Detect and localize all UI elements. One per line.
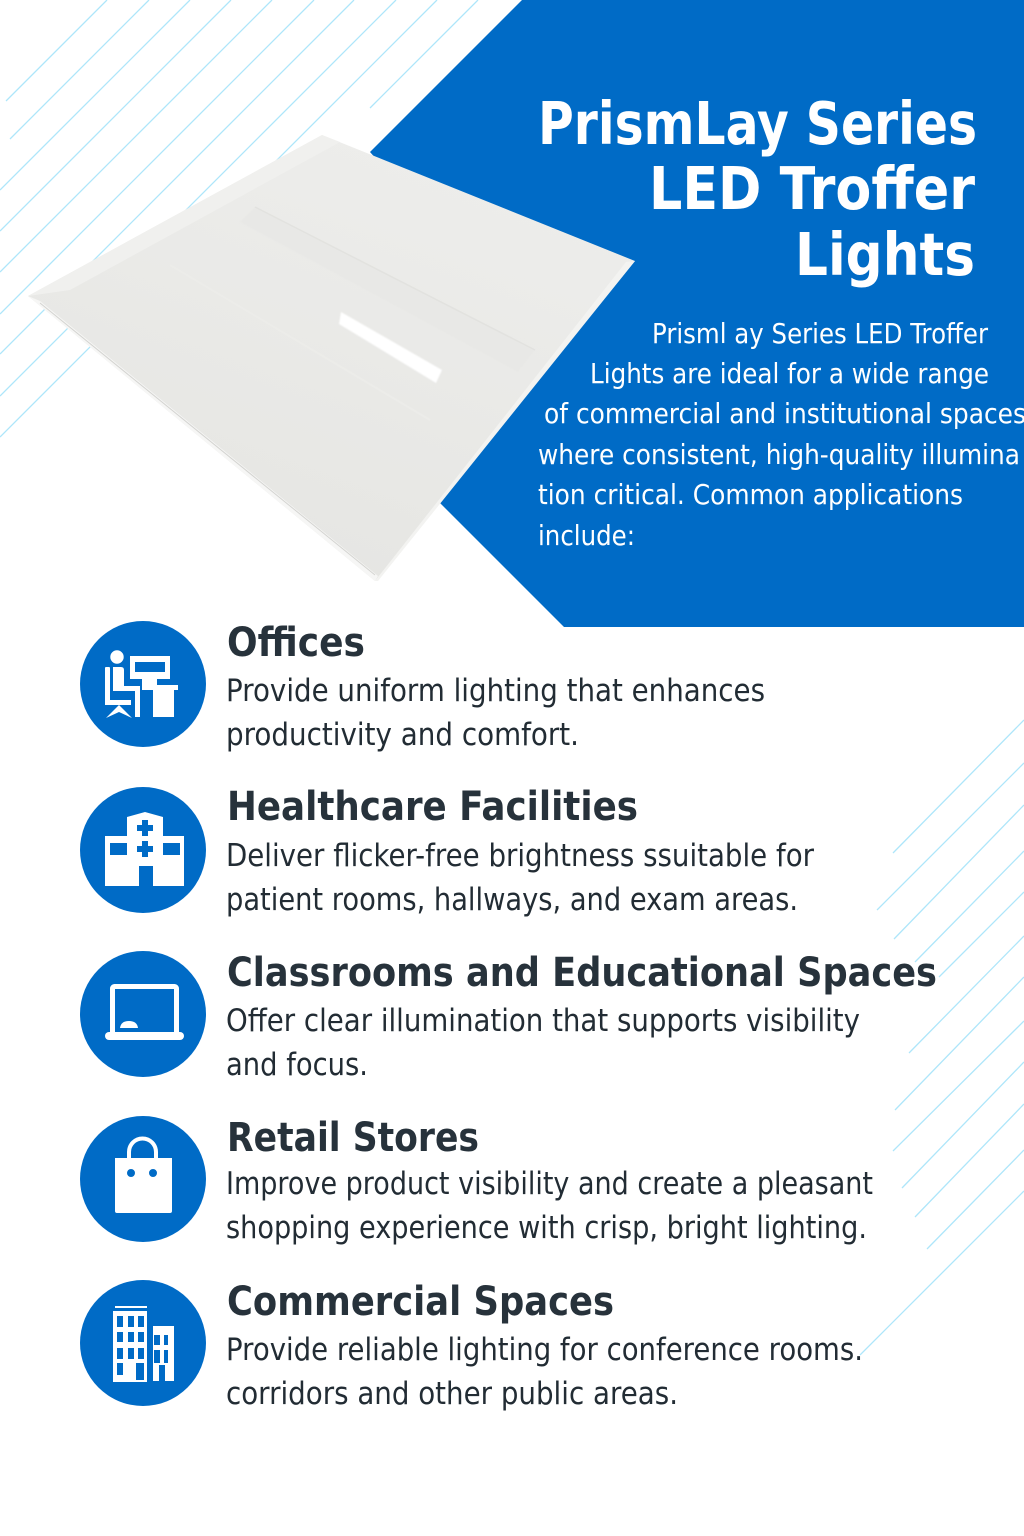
description: Provide uniform lighting that enhances bbox=[226, 673, 765, 709]
description bbox=[226, 1332, 863, 1412]
icon: hospital bbox=[80, 787, 206, 913]
description: corridors and other public areas. bbox=[226, 1376, 678, 1412]
heading: Classrooms and Educational Spaces bbox=[227, 950, 937, 996]
heading: Offices bbox=[227, 620, 365, 666]
heading: Commercial Spaces bbox=[227, 1279, 614, 1325]
title bbox=[538, 90, 977, 289]
description bbox=[226, 838, 814, 918]
item: Commercial Spaces bbox=[80, 1279, 863, 1412]
item: Retail Stores bbox=[80, 1115, 873, 1246]
intro text: Prisml ay Series LED Troffer bbox=[652, 318, 989, 350]
description: and focus. bbox=[226, 1047, 368, 1083]
description: shopping experience with crisp, bright lighting. bbox=[226, 1210, 867, 1246]
description: Improve product visibility and create a pleasant bbox=[226, 1166, 873, 1202]
icon: laptop chalkboard bbox=[80, 951, 206, 1077]
intro text: Lights are ideal for a wide range bbox=[590, 358, 989, 390]
heading: Healthcare Facilities bbox=[227, 784, 638, 830]
description: patient rooms, hallways, and exam areas. bbox=[226, 882, 798, 918]
description: Offer clear illumination that supports visibility bbox=[226, 1003, 860, 1039]
icon: office worker at desk bbox=[80, 621, 206, 747]
icon: office buildings bbox=[80, 1280, 206, 1406]
product image: LED troffer panel bbox=[28, 135, 635, 581]
icon: shopping bag bbox=[80, 1116, 206, 1242]
intro text bbox=[538, 318, 1024, 552]
intro text: include: bbox=[538, 520, 635, 552]
description: Provide reliable lighting for conference rooms. bbox=[226, 1332, 863, 1368]
title: LED Troffer bbox=[649, 155, 975, 223]
description: productivity and comfort. bbox=[226, 717, 579, 753]
description bbox=[226, 1166, 873, 1246]
item: Classrooms and Educational Spaces bbox=[80, 950, 937, 1083]
blue title panel bbox=[370, 0, 1024, 627]
item: Offices bbox=[80, 620, 765, 753]
description bbox=[226, 673, 765, 753]
item: Healthcare Facilities bbox=[80, 784, 814, 918]
description: Deliver flicker-free brightness ssuitable for bbox=[226, 838, 814, 874]
intro text: tion critical. Common applications bbox=[538, 479, 963, 511]
description bbox=[226, 1003, 860, 1083]
title: Lights bbox=[795, 221, 975, 289]
heading: Retail Stores bbox=[227, 1115, 479, 1161]
